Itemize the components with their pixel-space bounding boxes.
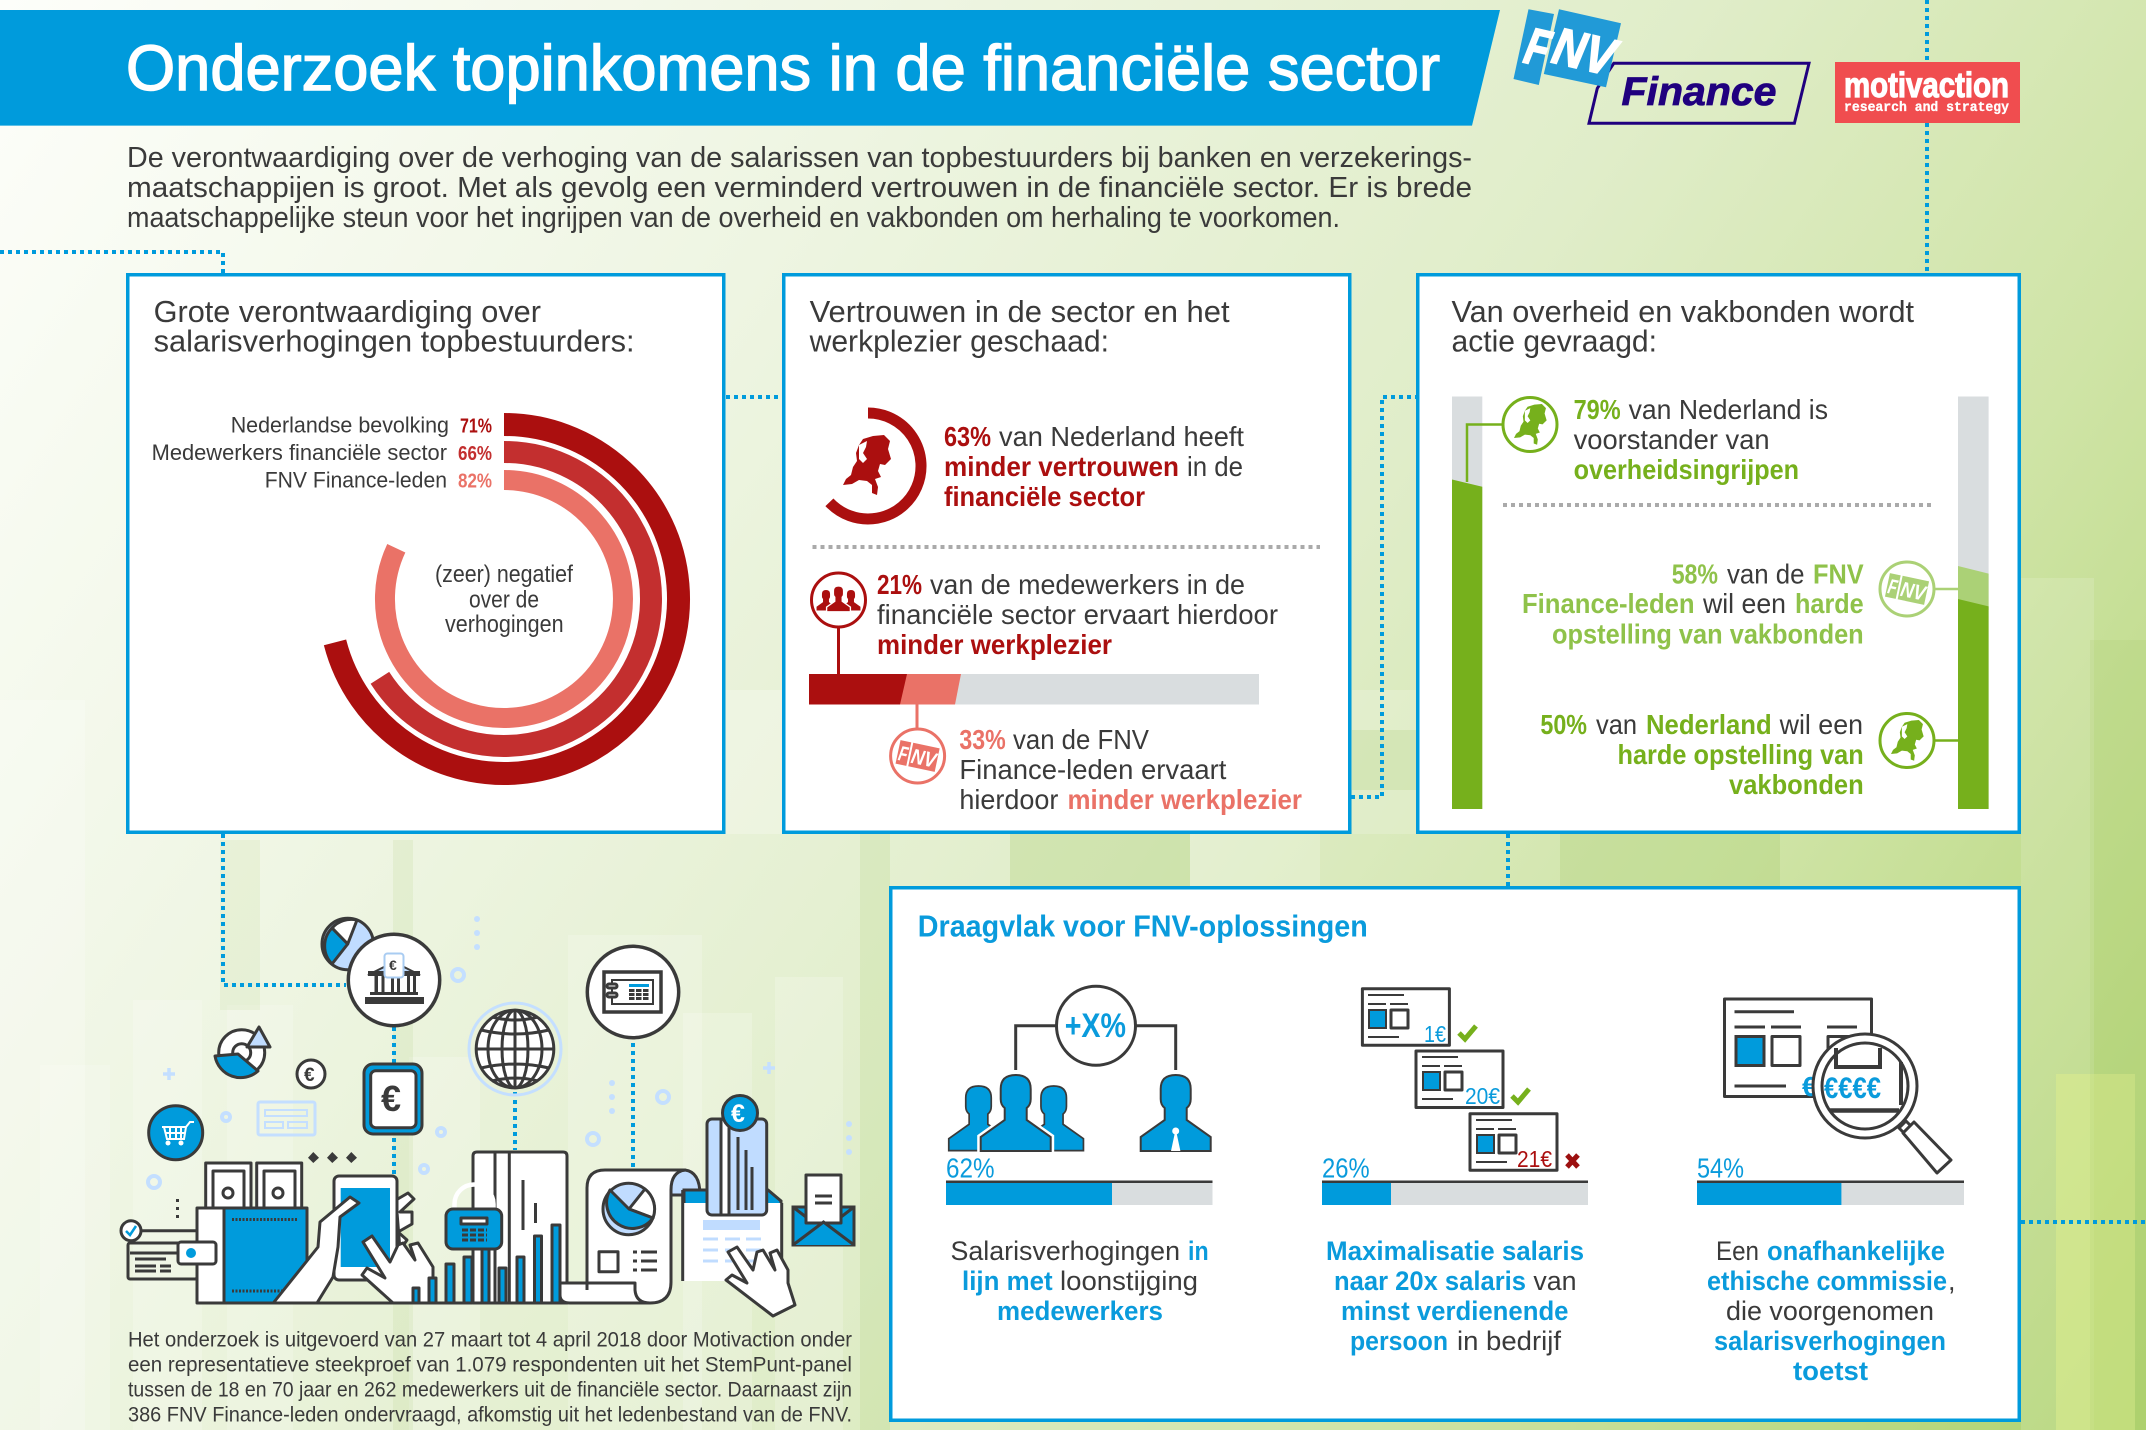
icon: magnifier over payslip: €: [1802, 1071, 1818, 1102]
bar: 26 percent: 26%: [1322, 1153, 1370, 1184]
icon: Netherlands circle 50 percent: [1880, 714, 1958, 768]
panel heading: [1452, 294, 1914, 358]
logo: Motivaction: motivaction: [1844, 66, 2009, 105]
text: 50 percent: Nederland: [1646, 709, 1772, 740]
methodology note: 386 FNV Finance-leden ondervraagd, afkomstig uit het ledenbestand van de FNV.: [128, 1403, 852, 1427]
panel heading: [809, 294, 1230, 358]
text: 58 percent: wil een: [1702, 588, 1786, 619]
icon: donut chart: [215, 1027, 270, 1078]
icon: FNV circle: NV: [909, 745, 940, 773]
bar: 62 percent: 62%: [946, 1153, 994, 1184]
icon: magnifier over payslip: €€€€: [1824, 1072, 1881, 1105]
text: 50 percent: van: [1596, 709, 1637, 740]
bar: 54 percent: 54%: [1697, 1153, 1744, 1184]
caption: column 2: in bedrijf: [1457, 1326, 1561, 1356]
text: 79 percent: overheidsingrijpen: [1574, 454, 1799, 485]
panel heading: Draagvlak voor FNV-oplossingen: [918, 909, 1368, 944]
icon: 63 percent arc with Netherlands map: [829, 413, 921, 519]
text: 58 percent: [1522, 558, 1864, 650]
icon: report scroll with pie chart: [560, 1170, 700, 1303]
text: 33 percent: minder werkplezier: [1068, 784, 1302, 815]
icon: payslips: [1362, 989, 1578, 1172]
caption: column 3: salarisverhogingen: [1714, 1326, 1946, 1356]
text: 58 percent: 58%: [1672, 558, 1718, 590]
caption: column 1: medewerkers: [997, 1296, 1163, 1326]
caption: column 2: naar 20x salaris: [1334, 1266, 1526, 1296]
logo: FNV Finance: [1514, 9, 1809, 123]
panel heading: [154, 294, 635, 358]
icon: payslips: 21€: [1517, 1146, 1552, 1172]
text: 33 percent: van de FNV: [1013, 724, 1150, 755]
panel heading: actie gevraagd:: [1452, 324, 1657, 358]
panel heading: salarisverhogingen topbestuurders:: [154, 324, 635, 358]
icon: euro coin: [297, 1060, 325, 1088]
icon: euro coin: €: [304, 1065, 315, 1086]
text: 21 percent: minder werkplezier: [877, 629, 1112, 660]
text: 58 percent: van de: [1727, 558, 1804, 590]
text: 21 percent: [877, 569, 1278, 660]
text: 21 percent: 21%: [877, 569, 922, 600]
text: 63 percent: financiële sector: [944, 481, 1145, 512]
text: 33 percent: [959, 724, 1302, 815]
text: 58 percent: harde: [1795, 588, 1864, 619]
intro paragraph: [127, 142, 1472, 234]
icon: globe: [469, 1003, 561, 1095]
icon: FNV circle 58 percent: NV: [1898, 578, 1929, 606]
icon: three diamonds: [176, 1152, 357, 1218]
methodology note: Het onderzoek is uitgevoerd van 27 maart tot 4 april 2018 door Motivaction onder: [128, 1328, 852, 1352]
text: 79 percent: voorstander van: [1574, 424, 1770, 455]
caption: column 2: minst verdienende: [1341, 1296, 1568, 1326]
text: 33 percent: 33%: [959, 724, 1006, 755]
intro paragraph: maatschappijen is groot. Met als gevolg een verminderd vertrouwen in de financiële sector. Er is brede: [127, 172, 1472, 204]
text: 63 percent: 63%: [944, 421, 991, 452]
panel: grote verontwaardiging: [128, 275, 724, 832]
stacked bar: [809, 674, 1259, 704]
chart legend labels: Medewerkers financiële sector: [152, 440, 447, 465]
caption: column 1: lijn met: [962, 1266, 1053, 1296]
left vertical bar: [1452, 396, 1482, 809]
icon: shopping cart: [149, 1106, 203, 1160]
methodology note: een representatieve steekproef van 1.079 respondenten uit het StemPunt-panel: [128, 1353, 852, 1377]
icon: card in folder with hand: €: [731, 1100, 745, 1128]
illustration: finance scene: [121, 916, 854, 1316]
methodology note: tussen de 18 en 70 jaar en 262 medewerkers uit de financiële sector. Daarnaast zijn: [128, 1378, 852, 1402]
caption: column 3: [1707, 1236, 1956, 1386]
icon: employees circle: [812, 573, 866, 674]
chart centre label: verhogingen: [445, 611, 564, 638]
icon: pie behind bank: [322, 918, 373, 970]
text: 50 percent: vakbonden: [1729, 769, 1864, 800]
title: Onderzoek topinkomens in de financiële sector: [126, 32, 1440, 104]
text: 63 percent: in de: [1187, 451, 1243, 482]
caption: column 2: Maximalisatie salaris: [1326, 1236, 1584, 1266]
right vertical bar: [1958, 396, 1989, 809]
chart legend labels: 66%: [458, 443, 492, 465]
caption: column 2: [1326, 1236, 1584, 1356]
chart centre label: over de: [469, 586, 539, 614]
caption: column 3: Een: [1716, 1236, 1759, 1266]
icon: building with bars and lock: [197, 1152, 567, 1303]
icon: envelope with letter: [793, 1175, 854, 1245]
icon: FNV circle: F: [896, 742, 911, 767]
caption: column 2: persoon: [1350, 1326, 1448, 1356]
panel heading: Van overheid en vakbonden wordt: [1452, 294, 1914, 329]
caption: column 2: van: [1533, 1266, 1577, 1296]
caption: column 1: Salarisverhogingen: [950, 1236, 1180, 1266]
panel: vertrouwen en werkplezier: [784, 275, 1350, 832]
chart centre label: [435, 561, 573, 638]
logo: Motivaction: research and strategy: [1844, 100, 2010, 116]
text: 50 percent: 50%: [1540, 709, 1587, 740]
text: 50 percent: wil een: [1779, 709, 1863, 740]
caption: column 1: loonstijging: [1060, 1266, 1198, 1296]
chart legend labels: 82%: [458, 470, 492, 492]
text: 79 percent: [1574, 394, 1828, 485]
bar: 54 percent: [1697, 1153, 1964, 1205]
intro paragraph: De verontwaardiging over de verhoging van de salarissen van topbestuurders bij banken en verzekerings-: [127, 142, 1472, 174]
caption: column 1: in: [1188, 1236, 1209, 1266]
text: 50 percent: harde opstelling van: [1618, 739, 1864, 770]
decorative small shapes: [148, 916, 852, 1188]
panel heading: Grote verontwaardiging over: [154, 294, 541, 329]
icon: card in folder with hand: [683, 1096, 795, 1316]
text: 58 percent: opstelling van vakbonden: [1552, 618, 1864, 650]
panel heading: Vertrouwen in de sector en het: [810, 294, 1230, 329]
text: 33 percent: hierdoor: [959, 784, 1058, 815]
text: 58 percent: FNV: [1813, 558, 1864, 590]
text: 79 percent: van Nederland is: [1629, 394, 1828, 425]
intro paragraph: maatschappelijke steun voor het ingrijpen van de overheid en vakbonden om herhaling te voorkomen.: [127, 202, 1340, 234]
text: 21 percent: financiële sector ervaart hierdoor: [877, 599, 1278, 630]
caption: column 3: ethische commissie: [1707, 1266, 1947, 1296]
icon: salary raise people: [949, 986, 1211, 1151]
text: 63 percent: minder vertrouwen: [944, 451, 1179, 482]
icon: payslips: 20€: [1465, 1083, 1500, 1109]
icon: phone with hands: [273, 1176, 436, 1303]
caption: column 3: toetst: [1793, 1356, 1868, 1386]
text: 63 percent: van Nederland heeft: [999, 421, 1244, 452]
icon: euro chip: €: [381, 1078, 401, 1119]
text: 58 percent: Finance-leden: [1522, 588, 1695, 619]
icon: payslips: 1€: [1424, 1021, 1446, 1047]
chart legend labels: Nederlandse bevolking: [231, 412, 449, 438]
text: 79 percent: 79%: [1574, 394, 1621, 425]
logo: Motivaction: [1835, 62, 2020, 123]
text: 33 percent: Finance-leden ervaart: [959, 754, 1227, 785]
icon: payment card: [121, 1221, 197, 1279]
icon: Netherlands circle 79 percent: [1467, 398, 1557, 482]
icon: wallet: [178, 1208, 307, 1303]
text: 21 percent: van de medewerkers in de: [930, 569, 1245, 600]
icon: FNV circle 58 percent: F: [1886, 575, 1900, 600]
title banner: [0, 10, 1500, 126]
icon: FNV circle 58 percent: [1880, 562, 1958, 616]
radial bar chart: [335, 424, 679, 774]
panel heading: werkplezier geschaad:: [809, 324, 1109, 358]
caption: column 3: die voorgenomen: [1726, 1296, 1934, 1326]
methodology note: [128, 1328, 852, 1427]
text: 63 percent: [944, 421, 1244, 512]
icon: euro chip: [364, 1064, 422, 1134]
chart legend labels: 71%: [460, 416, 492, 438]
bar: 62 percent: [946, 1153, 1212, 1205]
chart legend labels: FNV Finance-leden: [265, 468, 447, 492]
bar: 26 percent: [1322, 1153, 1588, 1205]
caption: column 3: ,: [1948, 1266, 1956, 1296]
icon: bank circle: €: [389, 957, 397, 973]
icon: FNV circle: [891, 704, 945, 783]
logo: FNV Finance: Finance: [1622, 70, 1776, 114]
chart centre label: (zeer) negatief: [435, 561, 573, 588]
panel: draagvlak voor FNV-oplossingen: [891, 888, 2019, 1420]
panel: actie gevraagd: [1418, 275, 2019, 832]
logo: FNV Finance: NV: [1547, 17, 1624, 88]
caption: column 1: [950, 1236, 1209, 1326]
caption: column 3: onafhankelijke: [1767, 1236, 1945, 1266]
icon: safe circle: [587, 946, 679, 1038]
icon: salary raise people: +X%: [1065, 1007, 1126, 1045]
icon: magnifier over payslip: [1724, 999, 1951, 1173]
icon: banknotes: [206, 1163, 302, 1213]
text: 50 percent: [1540, 709, 1864, 800]
chart legend labels: [152, 412, 492, 492]
logo: FNV Finance: F: [1519, 17, 1557, 79]
icon: bank circle: [348, 934, 440, 1026]
